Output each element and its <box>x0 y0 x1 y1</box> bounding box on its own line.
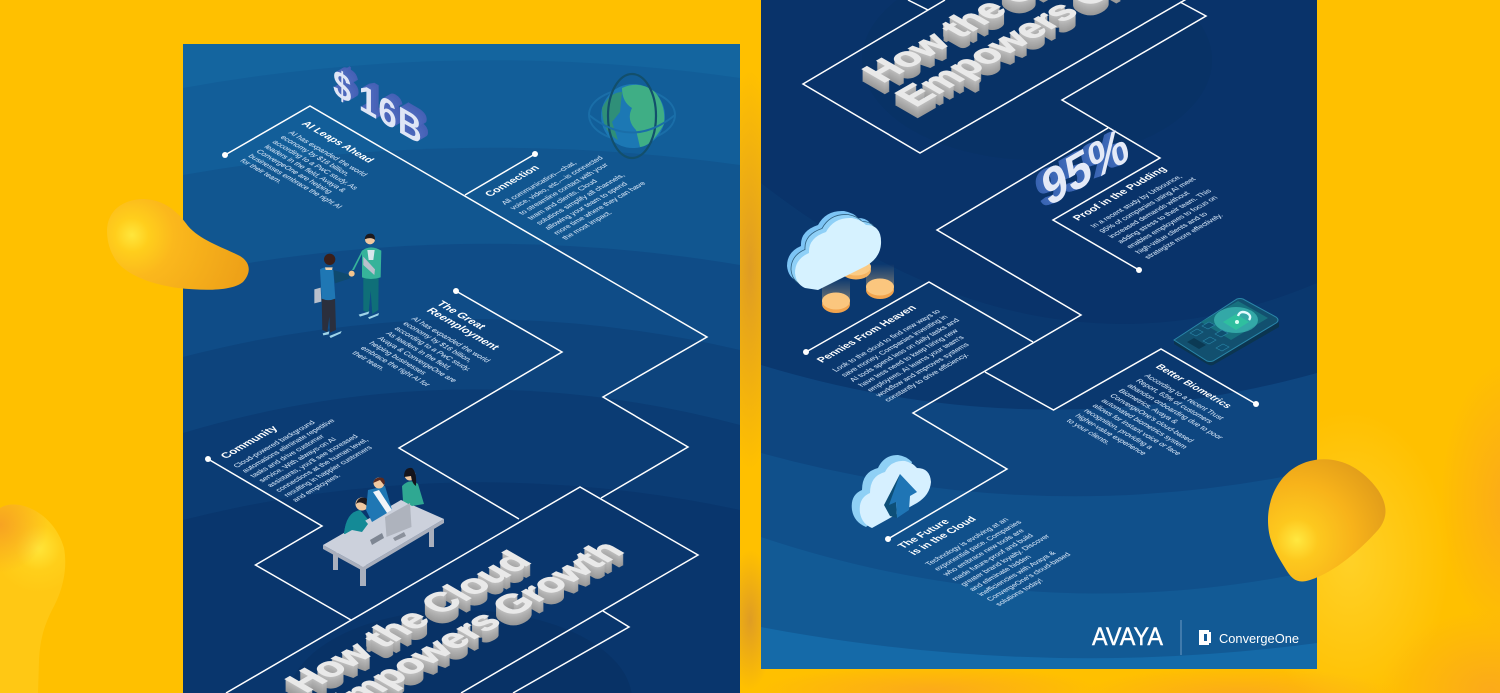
flow lines <box>803 0 1259 542</box>
block: Proof in the Pudding: 95% of companies using AI meet <box>1097 176 1198 234</box>
block: The Great Reemployment: embrace the right AI for <box>358 345 433 388</box>
block: Pennies From Heaven: save money. Companies investing in <box>839 314 950 378</box>
stat: 95%: 95% <box>1037 117 1134 218</box>
block: The Great Reemployment: Reemployment <box>423 306 502 352</box>
background bands <box>761 0 1317 669</box>
logos: Avaya and ConvergeOne: AVAYA <box>1092 623 1163 651</box>
icon: two people shaking hands <box>314 234 381 338</box>
block: The Future is in the Cloud: greater brand loyalty. Discover <box>958 533 1052 587</box>
block: The Future is in the Cloud: solutions today! <box>993 577 1045 607</box>
background bands <box>183 60 740 693</box>
block: The Future is in the Cloud: inefficiencies with Avaya & <box>975 550 1058 597</box>
block: Better Biometrics: abandon onboarding due to poor <box>1125 382 1226 441</box>
block: Community: Cloud-powered background <box>231 419 317 469</box>
block: Community: resulting in happier customers <box>281 444 375 498</box>
block: Proof in the Pudding: strategize more effectively. <box>1142 212 1225 260</box>
block: The Great Reemployment <box>350 299 513 398</box>
block: Community: tasks and drive customer <box>248 433 327 479</box>
icon: globe <box>589 74 675 158</box>
block: Pennies From Heaven <box>815 304 996 404</box>
block: The Great Reemployment: according to a PwC study. <box>392 325 474 372</box>
block: Connection <box>483 150 657 241</box>
block: Pennies From Heaven: constantly to drive efficiency. <box>882 352 971 403</box>
block: Pennies From Heaven: Look to the cloud to find new ways to <box>830 308 942 373</box>
block: Proof in the Pudding: enables employees to focus on <box>1124 194 1220 250</box>
block: AI Leaps Ahead: ConvergeOne are helping <box>254 148 335 195</box>
block: The Great Reemployment: AI has expanded the world <box>409 315 493 364</box>
block: AI Leaps Ahead <box>238 120 385 214</box>
block: Better Biometrics: ConvergeOne's cloud-based <box>1108 392 1196 444</box>
flow lines <box>205 106 707 693</box>
block: The Great Reemployment: their team. <box>350 350 388 372</box>
block: Connection: Connection <box>483 164 543 199</box>
block: Better Biometrics <box>1064 363 1243 476</box>
block: Pennies From Heaven: employees. AI learns your team's <box>865 334 967 393</box>
block: Community: connections at the human level, <box>273 437 371 493</box>
block: The Great Reemployment: economy by $16 billion, <box>401 320 475 363</box>
block: AI Leaps Ahead: AI has expanded the world <box>286 129 370 178</box>
block: Connection: allowing your team to spend <box>542 181 630 231</box>
block: AI Leaps Ahead: for their team. <box>238 157 285 185</box>
block: Pennies From Heaven: Pennies From Heaven <box>815 304 919 365</box>
block: The Great Reemployment: Avaya & ConvergeOne are <box>375 335 459 384</box>
block: The Future is in the Cloud: Technology is evolving at an <box>923 516 1011 567</box>
panel: right poster (bottom half) <box>761 0 1317 669</box>
block: AI Leaps Ahead: according to a PwC study. As <box>270 139 361 191</box>
block: Connection: more time where they can have <box>551 180 648 236</box>
block: Community <box>218 413 387 503</box>
block: Proof in the Pudding: high-value clients and to <box>1133 211 1210 255</box>
block: The Future is in the Cloud: who embrace new tools are <box>940 528 1026 578</box>
block: Better Biometrics: Biometrics. Avaya & <box>1116 387 1181 425</box>
block: Pennies From Heaven: workflow and improves systems <box>872 341 971 399</box>
blob: right <box>1268 459 1386 582</box>
block: Connection: team and clients. Cloud <box>525 178 599 221</box>
block: The Great Reemployment: The Great <box>433 299 488 331</box>
blob: bottom-left <box>0 504 65 693</box>
block: Community: assistants, you'll see increased <box>265 433 360 488</box>
logos: Avaya and ConvergeOne <box>1092 620 1299 655</box>
logos: Avaya and ConvergeOne: ConvergeOne <box>1219 631 1299 646</box>
block: Pennies From Heaven: AI tools spend less on daily tasks and <box>847 317 962 383</box>
block: The Future is in the Cloud: exponential pace. Companies <box>932 519 1024 572</box>
block: AI Leaps Ahead: economy by $16 billion, <box>278 134 353 177</box>
block: The Future is in the Cloud: ConvergeOne's cloud-based <box>984 551 1073 602</box>
block: Community: service. With always-on AI <box>256 436 338 484</box>
blob: left teardrop <box>107 199 249 290</box>
block: AI Leaps Ahead: leaders in the field, Avaya & <box>262 143 349 193</box>
block: Better Biometrics: higher-value experience <box>1073 412 1149 456</box>
block: The Future is in the Cloud <box>896 509 1087 608</box>
block: AI Leaps Ahead: businesses embrace the right AI <box>246 153 345 210</box>
block: The Future is in the Cloud: is in the Cloud <box>907 515 979 557</box>
block: Better Biometrics: According to a recent Trust <box>1142 372 1226 421</box>
block: Connection: voice, video, etc.—is connected <box>508 155 605 211</box>
icon: cloud with falling coins <box>787 211 894 313</box>
block: Community: automations eliminate repetitive <box>239 417 337 474</box>
block: Connection: All communication—chat, <box>499 160 579 206</box>
block: The Future is in the Cloud: made future-proof and build <box>949 532 1035 582</box>
stat: $16B: $ 16B <box>333 61 423 155</box>
block: The Great Reemployment: As leaders in the field, <box>384 330 454 371</box>
block: Better Biometrics: allows for instant voice or face <box>1090 402 1184 456</box>
block: Community: and employees. <box>290 472 343 503</box>
icon: phone with lock <box>1174 298 1279 365</box>
block: Connection: to streamline contact with your <box>516 161 611 216</box>
block: Proof in the Pudding <box>1071 165 1243 260</box>
block: Proof in the Pudding: Proof in the Pudding <box>1071 165 1170 223</box>
block: Proof in the Pudding: In a recent study by Unbounce, <box>1088 173 1184 229</box>
block: Connection: the most impact. <box>560 209 614 241</box>
block: Proof in the Pudding: adding stress to their team. This <box>1115 188 1214 245</box>
block: The Future is in the Cloud: and eliminate hidden <box>967 554 1033 592</box>
block: Better Biometrics: recognition, providing a <box>1082 407 1156 451</box>
block: Better Biometrics: to your clients. <box>1064 417 1113 446</box>
block: The Great Reemployment: helping businesses <box>367 340 429 376</box>
block: AI Leaps Ahead: AI Leaps Ahead <box>298 120 376 165</box>
block: Connection: solutions simplify all channels, <box>534 172 627 226</box>
block: Community: Community <box>218 424 282 461</box>
block: Better Biometrics: Report, 63% of customers <box>1134 377 1216 425</box>
icon: team at desk <box>323 468 444 586</box>
icon: cloud with upload arrow <box>852 455 931 528</box>
block: Pennies From Heaven: have less need to keep hiring new <box>856 327 961 388</box>
block: The Future is in the Cloud: The Future <box>896 518 953 551</box>
block: Proof in the Pudding: increased demands without <box>1106 190 1192 239</box>
block: Better Biometrics: automated biometrics system <box>1099 397 1190 450</box>
block: Better Biometrics: Better Biometrics <box>1152 363 1234 410</box>
panel: left poster (top half) <box>183 44 740 693</box>
